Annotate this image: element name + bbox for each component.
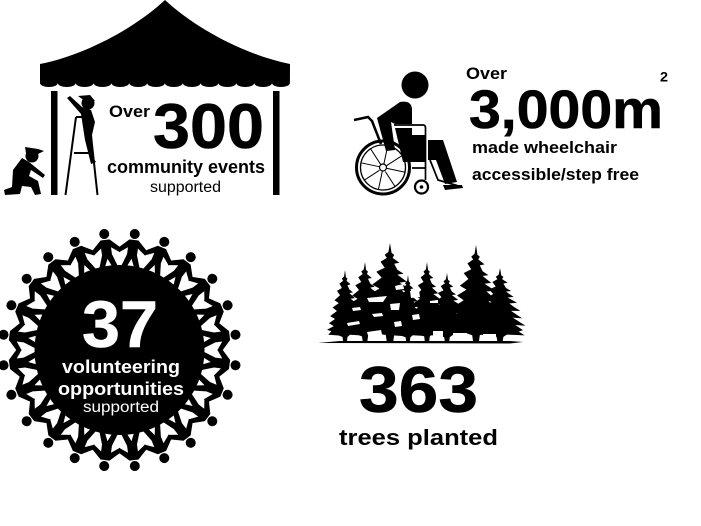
icon: ring of people [0,227,243,473]
text: 37: 37 [82,287,158,361]
panel: volunteering [0,227,243,473]
text: over: Over [109,102,150,121]
text: accessible/step free: accessible/step free [472,165,639,184]
text: superscript 2: 2 [660,70,668,84]
panel: trees [318,243,526,450]
icon: person on ladder [66,95,98,195]
panel: wheelchair access [354,65,668,194]
icon: tent canopy [40,0,290,87]
text: volunteering: volunteering [62,357,180,377]
text: trees planted: trees planted [339,425,498,450]
text: 363: 363 [359,353,478,426]
text: community events: community events [107,157,265,177]
text: supported: supported [150,179,221,196]
text: over: Over [466,65,508,83]
icon: forest [318,243,526,344]
text: 3,000m: 3,000m [469,80,663,140]
panel: community events [4,0,290,196]
icon: crouching person [4,147,45,195]
text: opportunities: opportunities [58,379,184,399]
icon: tent poles [51,91,280,195]
text: made wheelchair: made wheelchair [472,138,617,157]
text: 300: 300 [153,92,264,162]
text: supported: supported [83,399,159,416]
icon: wheelchair user [354,72,463,194]
